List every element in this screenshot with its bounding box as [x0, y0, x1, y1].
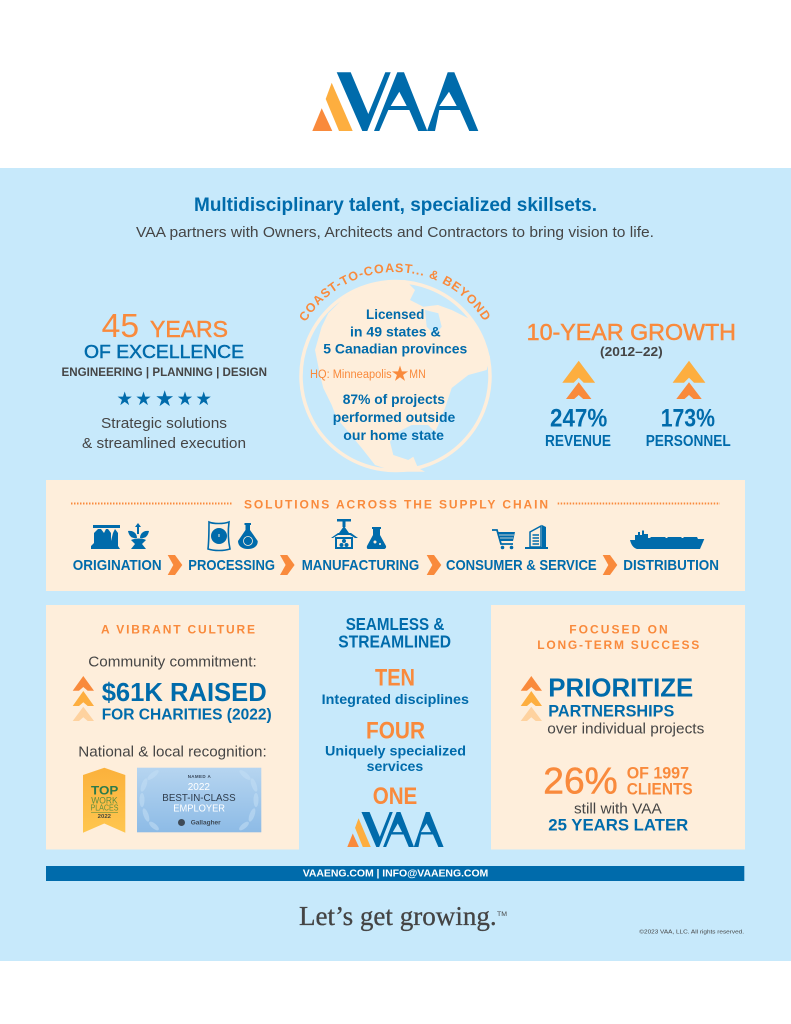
badge: top workplaces: TOP [91, 783, 118, 797]
icon: revenue chevrons [562, 361, 595, 399]
projects text [333, 391, 456, 443]
labels: ORIGINATION [73, 557, 162, 574]
years: (2012–22) [600, 345, 663, 359]
26 percent stat: 26% [543, 760, 618, 801]
footer contact bar: VAAENG.COM | INFO@VAAENG.COM [303, 868, 489, 880]
four: services [367, 758, 424, 774]
raised stat [102, 677, 272, 723]
tagline: Let’s get growing. [299, 901, 497, 931]
45 years: YEARS [150, 316, 228, 342]
logo: VAA [312, 72, 478, 131]
26 percent stat: OF 1997 [627, 763, 689, 782]
one: ONE [373, 783, 417, 810]
projects text: 87% of projects [343, 391, 445, 407]
revenue stat: REVENUE [545, 433, 611, 450]
personnel stat: PERSONNEL [646, 433, 731, 450]
projects text: our home state [343, 427, 444, 443]
icon: cargo ship [630, 530, 704, 549]
26 percent stat: CLIENTS [627, 779, 693, 798]
still with VAA: 25 YEARS LATER [548, 816, 688, 835]
prioritize text: over individual projects [547, 720, 704, 737]
globe water: Hudson Bay [425, 310, 442, 335]
badge: best-in-class employer [137, 768, 261, 832]
icon: flask [367, 527, 386, 549]
badge: top workplaces: WORK [91, 795, 118, 806]
intro text: VAA partners with Owners, Architects and Contractors to bring vision to life. [136, 224, 654, 241]
icon: chevrons [521, 676, 542, 721]
raised stat: $61K RAISED [102, 677, 267, 707]
45 years [102, 307, 228, 344]
four [325, 717, 466, 774]
ten [322, 665, 469, 707]
45 years: 45 [102, 307, 139, 344]
icon: sprout [128, 523, 149, 549]
disciplines: ENGINEERING | PLANNING | DESIGN [62, 365, 267, 379]
recognition: National & local recognition: [78, 744, 267, 761]
strategic solutions text [82, 415, 246, 452]
icon: personnel chevrons [673, 361, 705, 399]
arrows [168, 555, 617, 575]
panel: 10-year growth [527, 319, 736, 450]
labels: MANUFACTURING [302, 557, 419, 574]
licensed text [323, 306, 468, 356]
badge: top workplaces [83, 768, 125, 833]
prioritize text [547, 673, 704, 737]
supply chain heading: SOLUTIONS ACROSS THE SUPPLY CHAIN [244, 497, 548, 511]
labels [73, 557, 719, 574]
ten: TEN [375, 665, 415, 692]
badge: top workplaces: PLACES [90, 804, 118, 813]
icon: farm silos [91, 525, 120, 549]
licensed text: in 49 states & [350, 324, 441, 340]
labels: CONSUMER & SERVICE [446, 557, 597, 574]
icon: sack [208, 522, 230, 550]
seamless heading [338, 614, 451, 652]
prioritize text: PRIORITIZE [548, 673, 693, 703]
revenue stat: 247% [550, 405, 607, 433]
badge: top workplaces: 2022 [98, 814, 111, 820]
four: FOUR [366, 717, 425, 744]
HQ marker [310, 366, 426, 381]
success heading [537, 622, 699, 652]
globe ring [301, 282, 490, 470]
labels: PROCESSING [188, 557, 275, 574]
growth heading: 10-YEAR GROWTH [527, 319, 736, 345]
seamless heading: STREAMLINED [338, 632, 451, 652]
personnel stat [646, 405, 731, 450]
panel: seamless and streamlined [322, 614, 469, 847]
licensed text: Licensed [366, 306, 424, 322]
icon: office building [525, 525, 548, 549]
ten: Integrated disciplines [322, 691, 469, 707]
personnel stat: 173% [661, 405, 715, 433]
prioritize text: PARTNERSHIPS [548, 702, 674, 721]
badge: best-in-class employer: 2022 [188, 781, 210, 793]
badge: best-in-class employer: Gallagher [191, 819, 221, 826]
tagline: TM [497, 912, 507, 918]
of excellence: OF EXCELLENCE [84, 341, 244, 362]
revenue stat [545, 405, 611, 450]
four: Uniquely specialized [325, 743, 466, 759]
icon: shopping cart [492, 530, 515, 549]
badge: best-in-class employer: EMPLOYER [173, 804, 225, 815]
copyright: ©2023 VAA, LLC. All rights reserved. [639, 928, 745, 935]
panel: supply chain [46, 480, 745, 591]
labels: DISTRIBUTION [623, 557, 719, 574]
community commitment: Community commitment: [88, 654, 257, 671]
badge: best-in-class employer: BEST-IN-CLASS [162, 793, 236, 804]
panel: 45 years of excellence [62, 307, 267, 452]
icon: five stars [118, 390, 211, 406]
strategic solutions text: Strategic solutions [101, 415, 227, 432]
footer contact bar [46, 866, 744, 881]
panel: globe [299, 264, 492, 472]
panel: long-term success [491, 605, 745, 850]
icon: press machine [331, 519, 358, 549]
HQ marker: HQ: Minneapolis [310, 369, 392, 381]
raised stat: FOR CHARITIES (2022) [102, 706, 272, 723]
26 percent stat [543, 760, 693, 801]
projects text: performed outside [333, 409, 456, 425]
icon: chevrons [73, 676, 94, 721]
seamless heading: SEAMLESS & [346, 614, 445, 634]
licensed text: 5 Canadian provinces [323, 340, 468, 356]
globe land: North America [315, 280, 490, 472]
culture heading: A VIBRANT CULTURE [101, 622, 255, 636]
arc text: COAST-TO-COAST... & BEYOND [300, 264, 490, 320]
logo: small VAA [347, 812, 444, 847]
heading: Multidisciplinary talent, specialized skillsets. [194, 194, 597, 216]
panel: vibrant culture [46, 605, 299, 850]
still with VAA: still with VAA [574, 800, 662, 817]
HQ marker: MN [409, 369, 426, 381]
badge: best-in-class employer: NAMED A [188, 774, 211, 779]
success heading: LONG-TERM SUCCESS [537, 638, 699, 652]
icon: bottle [238, 523, 258, 549]
success heading: FOCUSED ON [569, 622, 668, 636]
strategic solutions text: & streamlined execution [82, 435, 246, 452]
still with VAA [548, 800, 688, 835]
